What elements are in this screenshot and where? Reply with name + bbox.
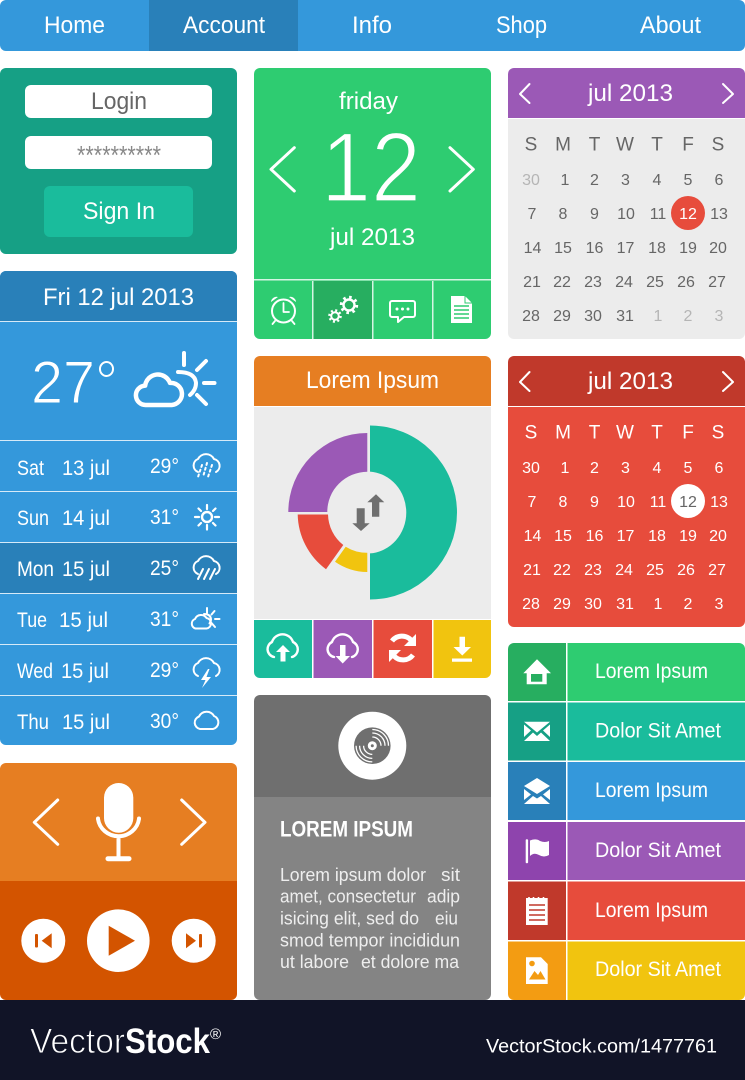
menu item: home — [508, 643, 745, 701]
login input — [25, 85, 212, 118]
calendar days: 30 — [522, 460, 540, 477]
panel: purple calendar — [508, 68, 745, 339]
navigation bar — [0, 0, 745, 51]
forecast: Wednesday — [17, 658, 220, 688]
menu item: flag: Dolor Sit Amet — [595, 839, 721, 862]
calendar days: 20 — [709, 240, 727, 257]
footer logo: ® — [210, 1026, 221, 1043]
panel: text card — [254, 695, 491, 1000]
card body text: ut labore — [280, 952, 349, 972]
icon: right chevron — [450, 148, 473, 191]
password input: ********** — [77, 140, 161, 170]
calendar days: 29 — [553, 596, 571, 613]
calendar days: 2 — [590, 172, 599, 189]
forecast: Sunday: 31° — [150, 506, 179, 529]
weekday row: M — [555, 422, 571, 444]
card body text: amet, consectetur — [280, 886, 416, 906]
forecast: Saturday — [17, 454, 220, 480]
menu item: closed mail: Dolor Sit Amet — [595, 720, 721, 742]
calendar days: 3 — [715, 308, 724, 325]
navigation bar: Info — [352, 12, 392, 39]
weekday row: W — [616, 422, 634, 444]
calendar days: 3 — [715, 596, 724, 613]
forecast: Wednesday: 29° — [150, 659, 179, 682]
weekday row: T — [651, 134, 663, 156]
calendar days: 13 — [710, 494, 728, 511]
forecast: Wednesday: 15 jul — [61, 660, 109, 683]
calendar days: 4 — [653, 460, 662, 477]
calendar days: 1 — [654, 308, 663, 325]
weekday row: F — [682, 134, 694, 156]
icon: swap arrows — [352, 494, 384, 531]
footer logo: Stock — [125, 1022, 210, 1061]
date number: 12 — [321, 112, 421, 222]
weekday row: W — [616, 134, 634, 156]
calendar days: 25 — [646, 562, 664, 579]
forecast: Thursday: Thu — [17, 711, 49, 734]
calendar days: 5 — [684, 460, 693, 477]
calendar days: 8 — [559, 494, 568, 511]
calendar days: 24 — [615, 562, 633, 579]
navigation bar: Home — [44, 12, 105, 39]
forecast: Monday: 25° — [150, 557, 179, 580]
forecast: Thursday — [17, 710, 218, 734]
calendar days: 26 — [677, 562, 695, 579]
calendar days: 7 — [528, 494, 537, 511]
forecast: Saturday: Sat — [17, 457, 44, 480]
menu item: closed mail — [508, 702, 745, 760]
forecast: Wednesday: Wed — [17, 660, 53, 683]
calendar heading: jul 2013 — [587, 368, 673, 395]
calendar days: 9 — [590, 206, 599, 223]
forecast: Thursday: 15 jul — [62, 711, 110, 734]
calendar days: 18 — [648, 240, 666, 257]
calendar days: 1 — [654, 596, 663, 613]
calendar days: 4 — [653, 172, 662, 189]
card body text: eiu — [435, 908, 458, 928]
calendar days: 15 — [554, 528, 572, 545]
calendar days: 27 — [708, 274, 726, 291]
weekday row: S — [525, 134, 537, 156]
calendar days: 6 — [715, 460, 724, 477]
icon: alarm clock — [271, 297, 296, 324]
forecast: Tuesday: 31° — [150, 608, 179, 631]
weather date heading: Fri 12 jul 2013 — [43, 284, 194, 311]
card body text: adip — [427, 886, 460, 906]
menu item: image file: Dolor Sit Amet — [595, 958, 721, 981]
icon: vinyl disc — [338, 712, 406, 780]
calendar days: 22 — [553, 274, 571, 291]
calendar days: 10 — [617, 494, 635, 511]
calendar days: 30 — [584, 596, 602, 613]
weekday row: T — [651, 422, 663, 444]
panel: donut chart — [254, 356, 491, 678]
forecast: Sunday — [17, 505, 219, 530]
weekday row — [525, 134, 724, 156]
calendar days: 14 — [524, 240, 542, 257]
calendar days: 6 — [715, 172, 724, 189]
icon: left chevron — [271, 148, 294, 191]
panel: login form — [0, 68, 237, 254]
card body text: sit — [441, 865, 460, 885]
calendar days: 23 — [584, 562, 602, 579]
footer logo: Vector — [30, 1022, 125, 1061]
calendar days: 11 — [650, 206, 666, 223]
panel: date card — [254, 68, 491, 339]
weekday row — [525, 422, 724, 444]
weekday row: S — [525, 422, 537, 444]
month label: jul 2013 — [329, 224, 415, 251]
menu item: notepad — [508, 882, 745, 940]
calendar days — [522, 460, 728, 613]
calendar days: 30 — [584, 308, 602, 325]
card body text: isicing elit, sed do — [280, 908, 419, 928]
forecast: Thursday: 30° — [150, 710, 179, 733]
calendar days: 27 — [708, 562, 726, 579]
calendar days: 10 — [617, 206, 635, 223]
panel: weather — [0, 271, 237, 745]
weekday row: S — [712, 134, 724, 156]
calendar days: 22 — [553, 562, 571, 579]
calendar days: 8 — [559, 206, 568, 223]
card body text — [280, 865, 460, 972]
menu item: open mail — [508, 762, 745, 820]
calendar days: 30 — [522, 172, 540, 189]
calendar days: 3 — [621, 460, 630, 477]
forecast: Monday: Mon — [17, 558, 54, 581]
calendar days: 2 — [684, 596, 693, 613]
icon: next month — [723, 84, 733, 103]
navigation bar: Account — [183, 12, 265, 39]
calendar days: 31 — [616, 308, 634, 325]
calendar days: 31 — [616, 596, 634, 613]
calendar days: 3 — [621, 172, 630, 189]
calendar days: 20 — [709, 528, 727, 545]
calendar days: 28 — [522, 308, 540, 325]
footer image id: VectorStock.com/1477761 — [486, 1037, 717, 1058]
calendar days: 23 — [584, 274, 602, 291]
sign in button: Sign In — [83, 198, 155, 225]
panel: red calendar — [508, 356, 745, 627]
forecast: Tuesday: Tue — [17, 609, 47, 632]
calendar days: 1 — [561, 460, 570, 477]
current temperature: 27° — [31, 349, 118, 416]
forecast: Tuesday: 15 jul — [59, 609, 108, 632]
calendar days: 17 — [617, 240, 634, 257]
calendar days: 19 — [679, 528, 697, 545]
calendar days: 11 — [650, 494, 666, 511]
icon: right chevron — [182, 800, 205, 844]
calendar heading: jul 2013 — [587, 80, 673, 107]
icon: previous month — [520, 372, 530, 391]
forecast: Saturday: 29° — [150, 455, 179, 478]
icon: microphone — [98, 783, 139, 859]
donut chart — [288, 426, 457, 600]
icon: document — [451, 296, 472, 323]
panel: icon menu list — [508, 643, 745, 1000]
calendar days: 25 — [646, 274, 664, 291]
menu item: notepad: Lorem Ipsum — [595, 899, 708, 922]
calendar days: 26 — [677, 274, 695, 291]
calendar days: 2 — [590, 460, 599, 477]
footer logo — [30, 1022, 221, 1061]
weekday row: F — [682, 422, 694, 444]
weekday label: friday — [339, 88, 398, 115]
calendar days: 21 — [523, 274, 541, 291]
calendar days: 5 — [684, 172, 693, 189]
calendar days: 16 — [586, 528, 604, 545]
weekday row: M — [555, 134, 571, 156]
forecast: Monday: 15 jul — [62, 558, 110, 581]
menu item: flag — [508, 822, 745, 880]
calendar days: 28 — [522, 596, 540, 613]
button: play — [87, 909, 150, 972]
icon: gears — [329, 297, 357, 322]
password input — [25, 136, 212, 170]
calendar days: 14 — [524, 528, 542, 545]
weekday row: T — [589, 422, 601, 444]
card heading: LOREM IPSUM — [280, 816, 413, 842]
calendar days — [522, 172, 728, 325]
login input: Login — [91, 88, 147, 115]
navigation bar: About — [640, 12, 701, 39]
selected day: 12 — [679, 206, 697, 223]
calendar days: 7 — [528, 206, 537, 223]
calendar days: 1 — [561, 172, 570, 189]
forecast: Saturday: 13 jul — [62, 457, 110, 480]
forecast: Tuesday — [17, 608, 220, 632]
calendar days: 19 — [679, 240, 697, 257]
icon: previous month — [520, 84, 530, 103]
calendar days: 29 — [553, 308, 571, 325]
button: refresh — [374, 620, 432, 678]
card body text: Lorem ipsum dolor — [280, 865, 426, 885]
calendar days: 21 — [523, 562, 541, 579]
card body text: smod tempor incididun — [280, 930, 460, 950]
calendar days: 13 — [710, 206, 728, 223]
selected day — [671, 484, 705, 518]
icon: left chevron — [34, 800, 58, 844]
forecast: Sunday: Sun — [17, 507, 49, 530]
calendar days: 17 — [617, 528, 634, 545]
card body text: et dolore ma — [361, 952, 460, 972]
forecast: Sunday: 14 jul — [62, 507, 110, 530]
icon: next month — [723, 372, 733, 391]
icon: partly cloudy — [136, 353, 214, 405]
menu item: home: Lorem Ipsum — [595, 660, 708, 683]
calendar days: 24 — [615, 274, 633, 291]
calendar days: 16 — [586, 240, 604, 257]
sign in button — [44, 186, 193, 237]
weekday row: S — [712, 422, 724, 444]
button: download — [434, 620, 491, 678]
calendar days: 9 — [590, 494, 599, 511]
weekday row: T — [589, 134, 601, 156]
selected day — [671, 196, 705, 230]
calendar days: 2 — [684, 308, 693, 325]
selected day: 12 — [679, 494, 697, 511]
button: next — [172, 919, 216, 963]
button: previous — [21, 919, 65, 963]
footer bar — [0, 1000, 745, 1080]
icon: chat bubble — [390, 301, 415, 322]
button: cloud upload — [254, 620, 312, 678]
button: cloud download — [314, 620, 372, 678]
menu item: open mail: Lorem Ipsum — [595, 779, 708, 802]
donut heading: Lorem Ipsum — [306, 367, 439, 394]
menu item: image file — [508, 942, 745, 1000]
calendar days: 18 — [648, 528, 666, 545]
panel: media player — [0, 763, 237, 1000]
forecast: Monday — [17, 556, 220, 581]
navigation bar: Shop — [496, 12, 547, 39]
calendar days: 15 — [554, 240, 572, 257]
